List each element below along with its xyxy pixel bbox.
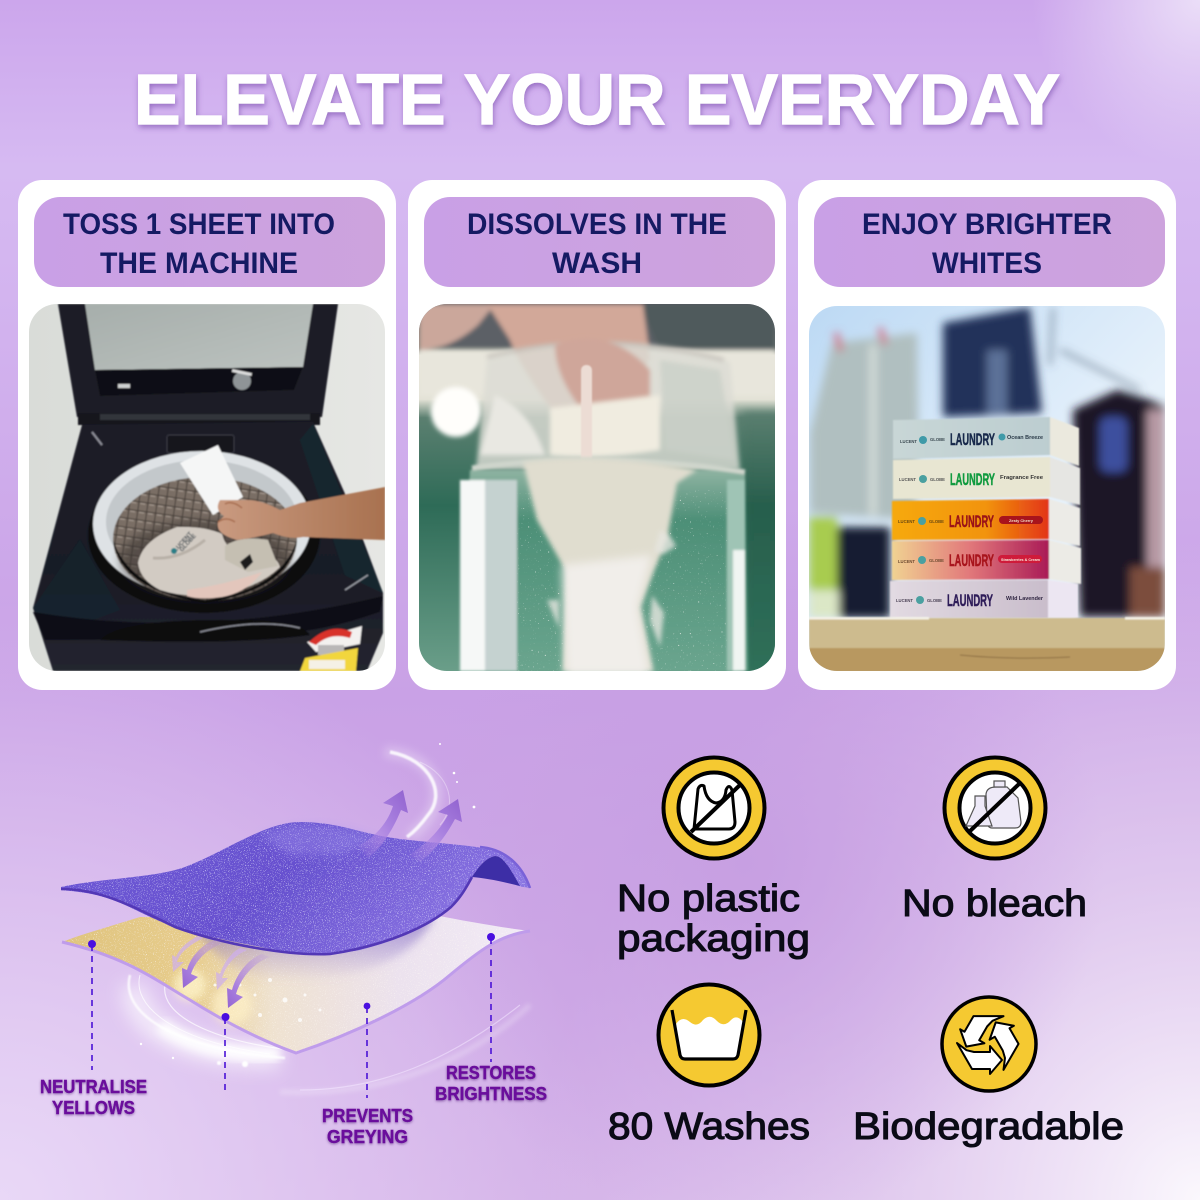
arrows: up	[358, 790, 462, 862]
icon: no bleach	[944, 758, 1046, 858]
heading pill: toss sheet: THE MACHINE	[100, 247, 298, 280]
label: neutralise yellows	[40, 1077, 147, 1118]
photo: sheet dissolving in glass of water	[419, 304, 782, 677]
label: restores brightness: RESTORES	[446, 1063, 536, 1083]
lower sheet	[62, 915, 530, 1053]
ledge	[809, 617, 1165, 672]
photo: stack of laundry boxes in front of washing line: Ocean Breeze	[1007, 435, 1043, 441]
heading pill: dissolves: WASH	[552, 247, 642, 280]
box stack	[890, 417, 1081, 618]
text: biodegradable: Biodegradable	[853, 1106, 1124, 1148]
text: no plastic packaging: packaging	[617, 918, 810, 960]
photo: stack of laundry boxes in front of washing line: LUCENT	[896, 598, 913, 603]
photo: washing machine with hand dropping sheet: LUCENT	[173, 531, 194, 553]
photo: stack of laundry boxes in front of washing line: LUCENT	[900, 439, 917, 444]
label: neutralise yellows: YELLOWS	[52, 1098, 135, 1118]
title: ELEVATE YOUR EVERYDAY	[134, 61, 1060, 140]
panel: brighter whites	[798, 180, 1176, 690]
panel: dissolves	[408, 180, 786, 690]
photo: stack of laundry boxes in front of washing line: Wild Lavender	[1006, 596, 1044, 602]
photo: stack of laundry boxes in front of washing line: LAUNDRY	[949, 551, 994, 570]
photo: stack of laundry boxes in front of washing line: GLOBE	[930, 477, 945, 482]
label: restores brightness	[435, 1063, 547, 1104]
text: no bleach: No bleach	[902, 883, 1087, 925]
photo: stack of laundry boxes in front of washing line: Zesty Cherry	[1009, 518, 1034, 523]
photo: stack of laundry boxes in front of washing line: GLOBE	[929, 558, 944, 563]
swirl: top	[385, 743, 475, 837]
heading pill: toss sheet	[34, 197, 385, 287]
heading pill: brighter whites	[814, 197, 1165, 287]
photo: stack of laundry boxes in front of washing line: GLOBE	[930, 437, 945, 442]
label: prevents greying: GREYING	[327, 1127, 408, 1147]
glass	[460, 339, 748, 675]
text: 80 washes: 80 Washes	[608, 1106, 810, 1148]
text: no plastic packaging: No plastic	[617, 878, 800, 920]
photo: stack of laundry boxes in front of washing line: Strawberries & Cream	[1001, 557, 1040, 562]
photo: stack of laundry boxes in front of washing line: GLOBE	[927, 598, 942, 603]
photo: stack of laundry boxes in front of washing line: LUCENT	[898, 519, 915, 524]
label: prevents greying	[322, 1106, 413, 1147]
heading pill: dissolves	[424, 197, 775, 287]
photo: stack of laundry boxes in front of washing line: GLOBE	[929, 519, 944, 524]
photo: stack of laundry boxes in front of washing line: Fragrance Free	[1000, 475, 1043, 481]
icon: recycling	[942, 997, 1036, 1091]
photo: washing machine with hand dropping sheet: GLOBE	[179, 533, 198, 553]
label: prevents greying: PREVENTS	[322, 1106, 413, 1126]
heading pill: dissolves: DISSOLVES IN THE	[467, 208, 727, 241]
arrows: down	[172, 936, 270, 1008]
callout lines and dots	[88, 933, 495, 1098]
photo: stack of laundry boxes in front of washing line: LAUNDRY	[950, 470, 995, 489]
illustration: sheet layers	[40, 743, 547, 1147]
label: restores brightness: BRIGHTNESS	[435, 1084, 547, 1104]
heading pill: brighter whites: ENJOY BRIGHTER	[862, 208, 1112, 241]
panel: toss sheet	[18, 180, 396, 690]
photo: stack of laundry boxes in front of washing line: LUCENT	[898, 559, 915, 564]
icon: wash basin	[658, 984, 760, 1086]
text: no plastic packaging	[617, 878, 810, 960]
upper sheet	[61, 822, 530, 954]
photo: stack of laundry boxes in front of washing line: LAUNDRY	[947, 591, 993, 610]
photo: stack of laundry boxes in front of washing line	[809, 306, 1165, 672]
label: neutralise yellows: NEUTRALISE	[40, 1077, 147, 1097]
photo: stack of laundry boxes in front of washing line: LAUNDRY	[950, 430, 995, 449]
swirl: bottom	[129, 975, 530, 1092]
photo: stack of laundry boxes in front of washing line: LAUNDRY	[949, 512, 994, 531]
photo: stack of laundry boxes in front of washing line: LUCENT	[899, 477, 916, 482]
heading pill: brighter whites: WHITES	[932, 247, 1042, 280]
icon: no plastic bag	[664, 758, 764, 858]
photo: washing machine with hand dropping sheet	[29, 304, 385, 671]
heading pill: toss sheet: TOSS 1 SHEET INTO	[63, 208, 335, 241]
